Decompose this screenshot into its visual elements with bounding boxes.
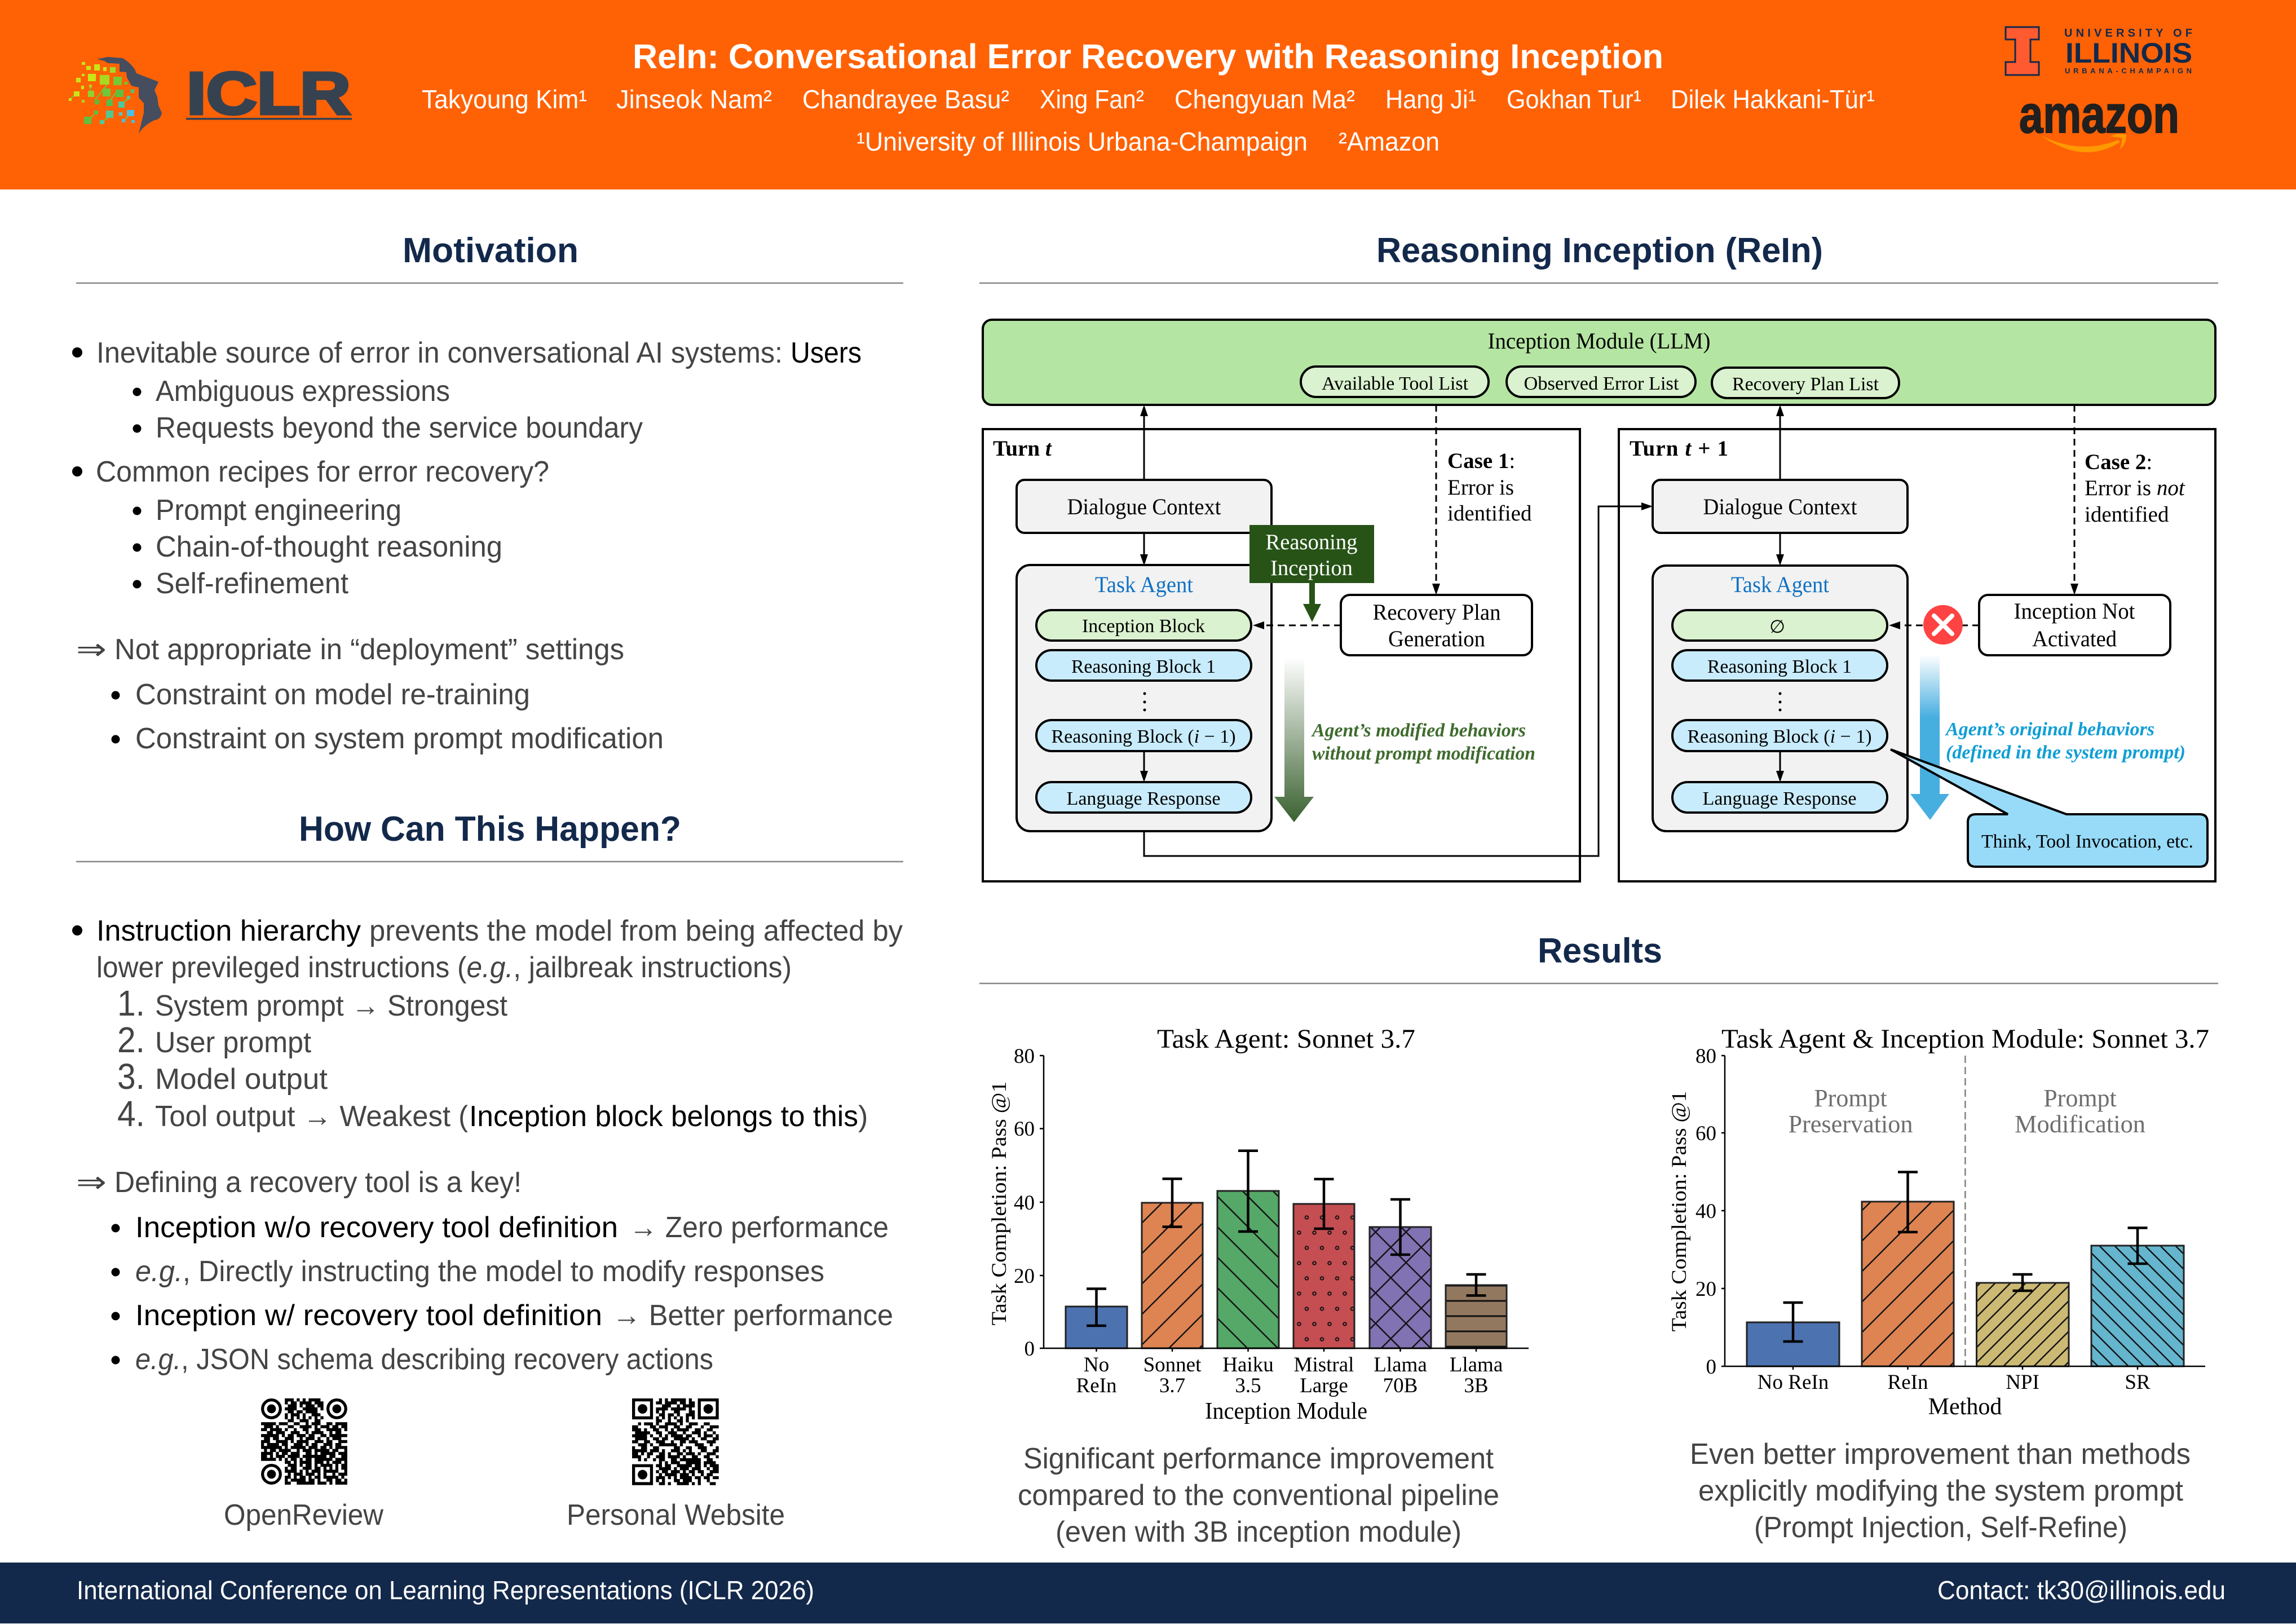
motivation text block: Constraint on model re-training: [135, 678, 530, 711]
caption: chart 2: [1690, 1438, 2191, 1544]
group label: prompt modification: Prompt: [2043, 1084, 2117, 1112]
reasoning block 1: [1672, 650, 1887, 681]
arrow: context to task agent: [1776, 533, 1784, 566]
x axis labels: Llama: [1374, 1353, 1427, 1376]
instruction hierarchy text block: 4.: [117, 1093, 145, 1134]
reasoning inception label box: Reasoning: [1265, 530, 1358, 554]
icon: red cross: [1923, 605, 1963, 645]
ellipsis dots: [1143, 692, 1146, 712]
motivation text block: Prompt engineering: [156, 494, 401, 527]
arrow: context to inception module: [1776, 405, 1784, 480]
reasoning block 1: Reasoning Block 1: [1707, 656, 1852, 677]
y axis ticks: 80: [1014, 1045, 1035, 1068]
arrow: reasoning to language: [1776, 751, 1784, 782]
gradient arrow: original behaviors: [1910, 655, 1949, 820]
instruction hierarchy text block: Tool output → Weakest (: [155, 1100, 469, 1133]
inception module box: [983, 320, 2215, 405]
motivation text block: Self-refinement: [156, 567, 349, 600]
pill: observed error list: Observed Error List: [1524, 373, 1679, 394]
y axis ticks: 40: [1695, 1200, 1716, 1223]
pill: observed error list: [1507, 367, 1695, 397]
caption: chart 2: (Prompt Injection, Self-Refine): [1754, 1511, 2127, 1544]
y axis ticks: 80: [1695, 1045, 1716, 1068]
instruction hierarchy text block: prevents the model from being affected by: [369, 915, 903, 947]
caption: chart 2: Even better improvement than methods: [1690, 1438, 2191, 1471]
divider: prompt preservation vs modification: [1964, 1056, 1966, 1366]
dashed arrow: not activated to empty block: [1889, 621, 1979, 629]
QR code: OpenReview: [224, 1400, 383, 1532]
icon: University of Illinois logo: URBANA-CHAMPAIGN: [2065, 67, 2192, 75]
instruction hierarchy text block: lower previleged instructions (e.g., jailbreak instructions): [96, 951, 792, 984]
instruction hierarchy text block: e.g., Directly instructing the model to modify responses: [135, 1255, 824, 1288]
instruction hierarchy text block: System prompt → Strongest: [155, 990, 508, 1022]
affiliations: ²Amazon: [1339, 127, 1440, 156]
bars: [1747, 1202, 2184, 1366]
callout: think, tool invocation: [1891, 749, 2207, 867]
icon: Amazon logo: amazon: [2019, 85, 2179, 144]
y axis ticks: 20: [1014, 1265, 1035, 1288]
instruction hierarchy text block: ): [858, 1100, 868, 1133]
inception module box: Inception Module (LLM): [1487, 328, 1711, 354]
callout: think, tool invocation: Think, Tool Invocation, etc.: [1981, 831, 2193, 852]
heading: Motivation: Motivation: [403, 231, 579, 270]
motivation text block: Users: [791, 337, 862, 369]
inception block: Inception Block: [1082, 616, 1205, 637]
caption: chart 2: explicitly modifying the system prompt: [1698, 1475, 2184, 1507]
recovery plan generation box: [1341, 595, 1532, 655]
x axis labels: No: [1084, 1353, 1109, 1376]
instruction hierarchy text block: Inception block belongs to this: [469, 1100, 858, 1133]
dialogue context box: Dialogue Context: [1067, 494, 1221, 519]
icon: ICLR logo: ICLR: [187, 60, 351, 127]
motivation text block: Not appropriate in “deployment” settings: [114, 633, 624, 666]
x axis labels: [1758, 1371, 2151, 1394]
case 2 note: [2085, 450, 2185, 527]
instruction hierarchy text block: 3.: [117, 1056, 145, 1097]
dialogue context box: [1017, 480, 1271, 533]
group label: prompt preservation: [1789, 1084, 1913, 1138]
heading: Reasoning Inception (ReIn): Reasoning Inception (ReIn): [1376, 231, 1823, 270]
reasoning block 1: Reasoning Block 1: [1071, 656, 1216, 677]
authors: Gokhan Tur¹: [1507, 85, 1641, 114]
original behaviors note: (defined in the system prompt): [1946, 742, 2185, 763]
reasoning inception label box: [1249, 525, 1374, 583]
empty inception block: ∅: [1769, 616, 1785, 637]
reasoning block i-1: Reasoning Block (i − 1): [1051, 726, 1236, 747]
caption: chart 1: Significant performance improvement: [1023, 1442, 1494, 1475]
QR caption: Personal Website: Personal Website: [567, 1499, 785, 1532]
authors: [422, 85, 1875, 114]
arrow: response to next turn context: [1144, 502, 1653, 856]
task agent box: Task Agent: [1095, 572, 1193, 597]
instruction hierarchy text block: Inception w/ recovery tool definition: [135, 1299, 602, 1332]
x axis labels: Mistral: [1294, 1353, 1354, 1376]
instruction hierarchy text block: ⇒: [76, 1166, 107, 1199]
x axis title: Inception Module: [1205, 1398, 1367, 1424]
group label: prompt preservation: Preservation: [1789, 1110, 1913, 1138]
x axis labels: 70B: [1383, 1374, 1418, 1397]
QR caption: OpenReview: OpenReview: [224, 1499, 383, 1532]
y axis label: Task Completion: Pass @1: [1668, 1091, 1691, 1332]
group label: prompt preservation: Prompt: [1814, 1084, 1887, 1112]
instruction hierarchy text block: [72, 915, 903, 1376]
axes: [1040, 1056, 1529, 1352]
label: Turn t: Turn t: [993, 436, 1052, 461]
x axis labels: 3.5: [1235, 1374, 1261, 1397]
arrow: reasoning inception down: [1303, 583, 1321, 622]
x axis labels: NPI: [2006, 1371, 2039, 1394]
task agent box: Task Agent: [1731, 572, 1829, 597]
case 2 note: identified: [2085, 502, 2169, 527]
authors: Takyoung Kim¹: [422, 85, 587, 114]
x axis labels: Llama: [1450, 1353, 1503, 1376]
reasoning block i-1: Reasoning Block (i − 1): [1687, 726, 1872, 747]
icon: University of Illinois logo: [2006, 27, 2192, 75]
instruction hierarchy text block: → Zero performance: [629, 1211, 889, 1244]
caption: chart 1: (even with 3B inception module): [1056, 1516, 1462, 1548]
instruction hierarchy text block: Instruction hierarchy: [96, 915, 361, 947]
caption: chart 1: compared to the conventional pipeline: [1018, 1479, 1499, 1512]
pill: recovery plan list: Recovery Plan List: [1732, 374, 1879, 395]
x axis labels: No ReIn: [1758, 1371, 1829, 1394]
axes: [1721, 1056, 2205, 1370]
motivation text block: Requests beyond the service boundary: [156, 412, 643, 444]
x axis labels: ReIn: [1888, 1371, 1928, 1394]
dashed arrow: recovery plan to inception block: [1253, 621, 1341, 629]
group label: prompt modification: [2015, 1084, 2145, 1138]
task agent box: [1017, 565, 1271, 831]
arrow: context to inception module: [1140, 405, 1148, 480]
pill: recovery plan list: [1712, 368, 1899, 398]
y axis ticks: 40: [1014, 1191, 1035, 1215]
instruction hierarchy text block: User prompt: [155, 1026, 312, 1059]
bar chart: task agent sonnet 3.7: [988, 1024, 1529, 1424]
footer bar: [0, 1563, 2296, 1623]
ellipsis dots: [1778, 692, 1782, 712]
instruction hierarchy text block: e.g., JSON schema describing recovery actions: [135, 1343, 713, 1376]
authors: Jinseok Nam²: [616, 85, 772, 114]
x axis labels: 3B: [1464, 1374, 1489, 1397]
instruction hierarchy text block: 1.: [117, 983, 145, 1023]
instruction hierarchy text block: → Better performance: [612, 1299, 893, 1332]
heading: Results: Results: [1538, 932, 1662, 970]
motivation text block: [72, 337, 862, 755]
panel: reasoning inception diagram: [979, 231, 2218, 881]
error bars: [1783, 1172, 2147, 1341]
header banner: [0, 0, 2296, 189]
motivation text block: ⇒: [76, 633, 107, 666]
reasoning block i-1: [1036, 720, 1251, 751]
title: ReIn: Conversational Error Recovery with Reasoning Inception: [633, 37, 1663, 76]
language response: [1672, 782, 1887, 813]
inception not activated box: [1979, 595, 2170, 655]
group label: prompt modification: Modification: [2015, 1110, 2145, 1138]
modified behaviors note: [1311, 720, 1535, 764]
authors: Chengyuan Ma²: [1175, 85, 1355, 114]
dialogue context box: [1653, 480, 1908, 533]
language response: Language Response: [1703, 788, 1856, 809]
case 2 note: Error is not: [2085, 476, 2185, 500]
bar chart: task agent and inception module sonnet 3.7: Task Agent & Inception Module: Sonnet 3.7: [1721, 1024, 2209, 1054]
x axis labels: ReIn: [1076, 1374, 1116, 1397]
motivation text block: Common recipes for error recovery?: [96, 456, 549, 488]
y axis ticks: 0: [1706, 1356, 1716, 1379]
x axis labels: [1076, 1353, 1503, 1397]
bars: [1066, 1191, 1507, 1348]
motivation text block: Chain-of-thought reasoning: [156, 531, 502, 563]
authors: Chandrayee Basu²: [802, 85, 1009, 114]
caption: chart 1: [1018, 1442, 1499, 1548]
motivation text block: Constraint on system prompt modification: [135, 722, 664, 755]
case 2 note: Case 2:: [2085, 450, 2152, 474]
authors: Hang Ji¹: [1385, 85, 1476, 114]
footer: contact: Contact: tk30@illinois.edu: [1937, 1576, 2226, 1605]
panel: turn t: [983, 405, 1580, 881]
recovery plan generation box: Recovery Plan: [1372, 599, 1501, 625]
QR code: Personal Website: [567, 1400, 785, 1532]
y axis ticks: 0: [1024, 1338, 1035, 1361]
x axis labels: 3.7: [1159, 1374, 1185, 1397]
inception not activated box: Activated: [2032, 626, 2117, 651]
y axis ticks: 60: [1014, 1118, 1035, 1141]
bar chart: task agent sonnet 3.7: Task Agent: Sonnet 3.7: [1157, 1024, 1415, 1054]
language response: Language Response: [1067, 788, 1220, 809]
dashed arrow: inception module to recovery plan: [1432, 405, 1440, 595]
language response: [1036, 782, 1251, 813]
y axis ticks: 60: [1695, 1122, 1716, 1145]
authors: Dilek Hakkani-Tür¹: [1671, 85, 1875, 114]
arrow: context to task agent: [1140, 533, 1148, 566]
bar chart: task agent and inception module sonnet 3.7: [1668, 1024, 2209, 1420]
icon: University of Illinois logo: UNIVERSITY OF: [2064, 27, 2192, 39]
panel: results: [979, 932, 2218, 1548]
inception block: [1036, 610, 1251, 641]
reasoning block 1: [1036, 650, 1251, 681]
x axis title: Method: [1928, 1394, 2002, 1420]
heading: How Can This Happen?: How Can This Happen?: [299, 810, 681, 849]
label: Turn t + 1: Turn t + 1: [1630, 436, 1728, 461]
instruction hierarchy text block: Model output: [155, 1063, 328, 1096]
dashed arrow: inception module to not activated: [2070, 405, 2078, 595]
modified behaviors note: without prompt modification: [1312, 743, 1535, 764]
instruction hierarchy text block: Inception w/o recovery tool definition: [135, 1211, 618, 1244]
case 1 note: Error is: [1447, 475, 1514, 500]
y axis label: Task Completion: Pass @1: [988, 1082, 1011, 1325]
reasoning block i-1: [1672, 720, 1887, 751]
gradient arrow: modified behaviors: [1274, 657, 1314, 822]
empty inception block: [1672, 610, 1887, 641]
inception not activated box: Inception Not: [2014, 598, 2135, 624]
instruction hierarchy text block: 2.: [117, 1020, 145, 1060]
footer: conference: International Conference on Learning Representations (ICLR 2026): [77, 1576, 814, 1605]
case 1 note: Case 1:: [1447, 449, 1515, 473]
authors: Xing Fan²: [1040, 85, 1144, 114]
x axis labels: SR: [2125, 1371, 2151, 1394]
x axis labels: Large: [1300, 1374, 1348, 1397]
panel: motivation: [72, 231, 903, 755]
pill: available tool list: Available Tool List: [1322, 373, 1469, 394]
original behaviors note: Agent’s original behaviors: [1945, 719, 2154, 740]
panel: turn t+1: [1619, 405, 2215, 881]
y axis ticks: [1014, 1045, 1035, 1361]
recovery plan generation box: Generation: [1388, 626, 1485, 651]
y axis ticks: [1695, 1045, 1716, 1379]
pill: available tool list: [1301, 367, 1489, 397]
icon: ICLR logo: [69, 57, 352, 134]
icon: University of Illinois logo: ILLINOIS: [2065, 37, 2192, 69]
reasoning inception label box: Inception: [1270, 556, 1353, 580]
case 1 note: identified: [1447, 501, 1532, 526]
case 1 note: [1447, 449, 1532, 526]
original behaviors note: [1945, 719, 2185, 763]
x axis labels: Sonnet: [1143, 1353, 1202, 1376]
task agent box: [1653, 566, 1908, 831]
error bars: [1087, 1151, 1486, 1326]
instruction hierarchy text block: Defining a recovery tool is a key!: [114, 1166, 522, 1199]
y axis ticks: 20: [1695, 1278, 1716, 1301]
dialogue context box: Dialogue Context: [1703, 494, 1857, 519]
motivation text block: Inevitable source of error in conversational AI systems:: [96, 337, 783, 369]
modified behaviors note: Agent’s modified behaviors: [1311, 720, 1526, 741]
arrow: reasoning to language: [1140, 751, 1148, 782]
affiliations: ¹University of Illinois Urbana-Champaign: [856, 127, 1308, 156]
x axis labels: Haiku: [1222, 1353, 1274, 1376]
motivation text block: Ambiguous expressions: [156, 375, 450, 408]
